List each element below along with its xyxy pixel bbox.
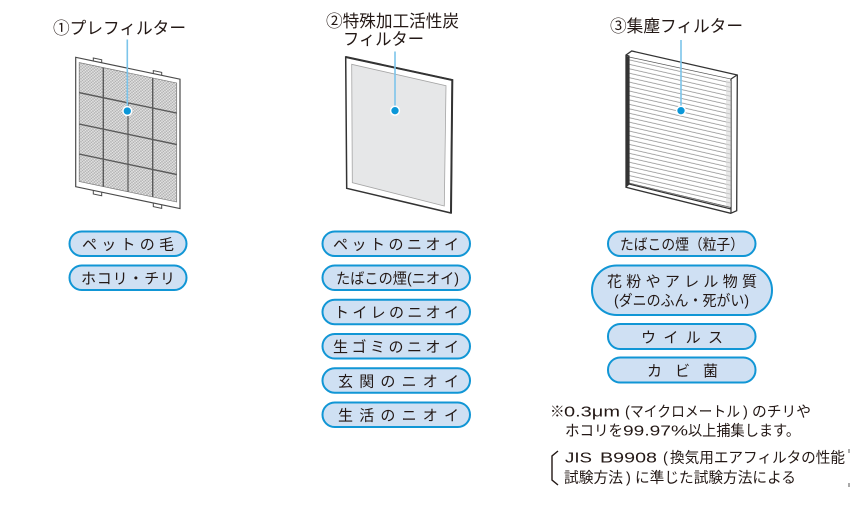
tag: tobacco smoke particles: たばこの煙（粒子） (620, 236, 744, 254)
tag: pet hair (70, 232, 186, 256)
tag: toilet odor: トイレのニオイ (334, 304, 459, 322)
leader line and dot: dust filter (677, 40, 685, 115)
heading: dust collection filter: ③集塵フィルター (610, 17, 743, 36)
panel: activated carbon filter (322, 12, 470, 427)
illustration: carbon filter sheet (346, 57, 452, 213)
note: particle capture rate: 0.3μm (564, 404, 620, 420)
panel: dust collection filter (550, 17, 849, 487)
note: JIS test standard: ( (663, 450, 668, 466)
tag: entrance odor: 玄関のニオイ (338, 374, 459, 390)
tag: virus (608, 324, 756, 349)
note: JIS test standard (552, 449, 849, 487)
note: JIS test standard: B9908 (600, 450, 657, 466)
note: JIS test standard: JIS (565, 450, 592, 466)
note: particle capture rate: のチリや (752, 404, 811, 420)
tag: living odor (322, 402, 470, 427)
heading: activated carbon filter: ②特殊加工活性炭 (326, 12, 459, 31)
tag: living odor: 生活のニオイ (338, 408, 459, 424)
tag: mold (608, 358, 756, 382)
panel: pre filter (53, 19, 186, 290)
tag: garbage odor (322, 334, 470, 358)
tag: dust (70, 266, 186, 290)
heading: pre filter: ①プレフィルター (53, 19, 186, 38)
note: particle capture rate (550, 404, 811, 440)
tag: pollen and allergens: (ダニのふん・死がい) (614, 292, 749, 310)
tag: tobacco odor (322, 266, 470, 290)
leader line and dot: pre filter (123, 40, 132, 115)
leader line and dot: carbon filter (391, 52, 399, 115)
note: JIS test standard: に準じた試験方法による (635, 470, 796, 486)
tag: entrance odor (322, 368, 470, 393)
tag: garbage odor: 生ゴミのニオイ (333, 338, 459, 356)
tag: toilet odor (322, 300, 470, 324)
note: particle capture rate: ※ (550, 404, 565, 420)
note: particle capture rate: マイクロメートル (630, 404, 740, 420)
note: JIS test standard: 試験方法 (564, 470, 623, 486)
note: particle capture rate: ホコリを (565, 422, 623, 440)
note: particle capture rate: ( (625, 404, 630, 420)
tag: pet odor (322, 232, 470, 256)
illustration: pleated dust filter (626, 51, 737, 213)
tag: pollen and allergens (592, 266, 772, 315)
note: JIS test standard: 換気用エアフィルタの性能 (670, 450, 845, 466)
tag: dust: ホコリ・チリ (81, 270, 175, 288)
tag: virus: ウイルス (641, 330, 723, 346)
illustration: pre filter mesh (76, 54, 180, 212)
note: particle capture rate: ) (743, 404, 748, 420)
heading second line: フィルター (343, 30, 424, 49)
tag: pet odor: ペットのニオイ (333, 236, 459, 254)
note: particle capture rate: 以上捕集します。 (688, 422, 800, 440)
note: particle capture rate: 99.97% (623, 424, 688, 440)
tag: pet hair: ペットの毛 (82, 236, 174, 254)
tag: mold: カビ菌 (647, 363, 718, 380)
note: JIS test standard: ) (626, 470, 631, 486)
tag: pollen and allergens: 花粉やアレル物質 (607, 272, 757, 290)
tag: tobacco smoke particles (608, 232, 756, 256)
tag: tobacco odor: たばこの煙(ニオイ) (336, 270, 459, 288)
